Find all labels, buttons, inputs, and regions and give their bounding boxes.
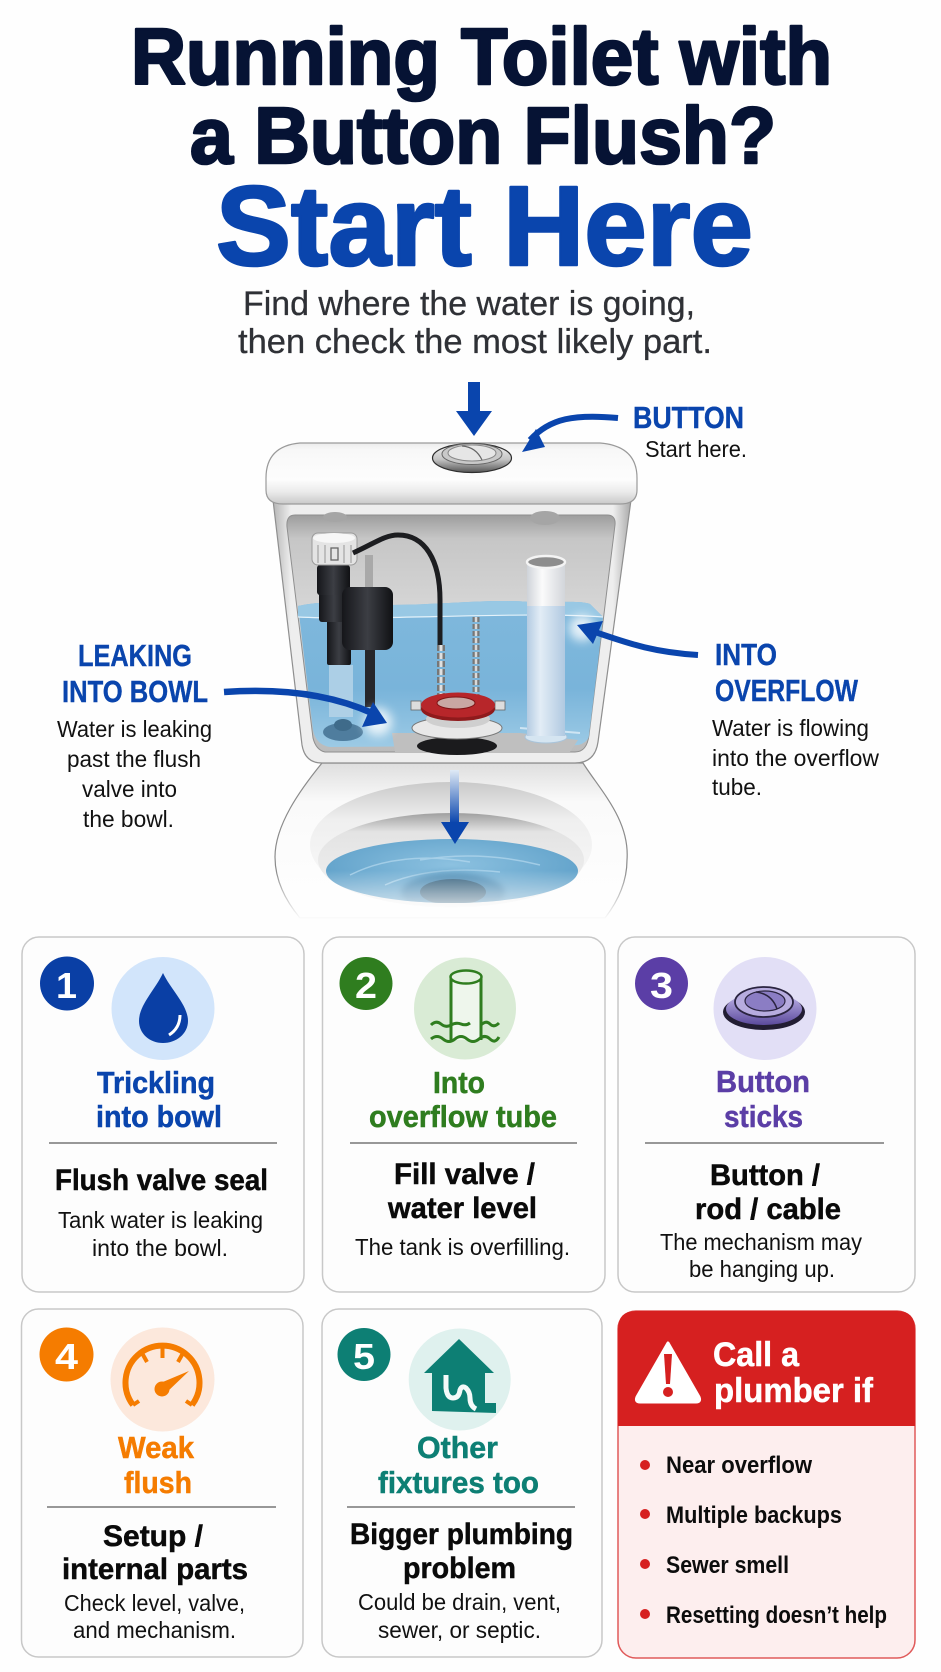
label: into overflow: Water is flowing (712, 715, 869, 741)
card 4 part (62, 1520, 248, 1586)
lid (266, 443, 637, 504)
warning list: Near overflow (666, 1452, 812, 1479)
label: button: Start here. (645, 436, 747, 462)
card 2 heading: Into (433, 1065, 485, 1100)
header text (713, 1336, 874, 1410)
badge 4: 4 (55, 1336, 78, 1377)
icon: house with pipe (409, 1328, 511, 1430)
cavity bolts (323, 511, 560, 525)
label: leaking into bowl: Water is leaking (57, 716, 212, 742)
header text: plumber if (714, 1372, 874, 1410)
card 5 heading: fixtures too (378, 1465, 539, 1500)
card 1 description: into the bowl. (92, 1235, 228, 1261)
card 5 part: Bigger plumbing (350, 1518, 573, 1551)
card 1 description (58, 1207, 263, 1261)
overflow tube (525, 556, 567, 743)
label: leaking into bowl: LEAKING (78, 638, 192, 673)
panel: card 4 weak flush (22, 1309, 303, 1657)
card 2 part (387, 1158, 537, 1225)
card 5 heading: Other (417, 1430, 498, 1465)
card 2 heading (369, 1065, 557, 1134)
card 3 part: Button / (710, 1159, 821, 1192)
card 2 description: The tank is overfilling. (355, 1234, 570, 1260)
header text: Call a (713, 1336, 800, 1374)
tank water (298, 601, 603, 752)
warning list (640, 1452, 887, 1629)
flapper chain (472, 617, 480, 697)
label: button: BUTTON (633, 400, 744, 435)
warning list: Resetting doesn’t help (666, 1602, 887, 1629)
card 4 part: Setup / (103, 1520, 204, 1553)
icon: water drop (112, 957, 214, 1060)
panel: card 2 into overflow tube (322, 937, 605, 1292)
card 5 description (358, 1589, 561, 1643)
title: Running Toilet with (131, 12, 832, 101)
toilet illustration (224, 382, 698, 918)
label: into overflow: INTO (715, 637, 777, 672)
fill valve (312, 533, 393, 741)
label: into overflow: into the overflow (712, 745, 879, 771)
warning header (618, 1311, 915, 1426)
card 5 part (350, 1518, 573, 1585)
card 4 description (64, 1590, 245, 1643)
title: a Button Flush? (190, 91, 776, 180)
badge 5: 5 (353, 1336, 375, 1377)
card 4 description: Check level, valve, (64, 1590, 245, 1616)
icon: flush button (714, 957, 816, 1060)
panel: card 5 other fixtures too (322, 1309, 602, 1657)
card 4 heading (118, 1430, 195, 1500)
label: into overflow (712, 637, 879, 800)
icon: pressure gauge (110, 1328, 214, 1432)
card 3 description: The mechanism may (660, 1229, 862, 1255)
card 3 heading: Button (716, 1064, 810, 1099)
label: leaking into bowl: the bowl. (83, 806, 174, 832)
label: leaking into bowl: valve into (82, 776, 177, 802)
arrow glows (364, 615, 595, 736)
card 1 heading (96, 1065, 222, 1134)
card 2 part: Fill valve / (394, 1158, 536, 1191)
label: leaking into bowl (57, 638, 212, 832)
card 4 heading: flush (124, 1465, 192, 1500)
card 4 description: and mechanism. (73, 1617, 236, 1643)
badge 4 (40, 1328, 94, 1382)
title (131, 12, 832, 180)
subtitle: Find where the water is going, (243, 285, 695, 323)
label: leaking into bowl: INTO BOWL (62, 674, 208, 709)
label: button (633, 400, 747, 462)
warning list: Multiple backups (666, 1502, 842, 1529)
card 2 part: water level (387, 1192, 537, 1225)
card 1 heading: into bowl (96, 1099, 222, 1134)
toilet tank body (273, 500, 631, 763)
card 1 description: Tank water is leaking (58, 1207, 263, 1233)
badge 3 (635, 957, 688, 1010)
flush button (432, 444, 512, 472)
panel: call a plumber (618, 1311, 915, 1658)
toilet bowl (275, 763, 627, 918)
arrow: down into bowl (441, 770, 469, 844)
card 3 heading (716, 1064, 810, 1134)
hose connector (437, 645, 445, 695)
heading: start here: Start Here (216, 163, 753, 289)
badge 5 (338, 1328, 390, 1381)
card 2 heading: overflow tube (369, 1099, 557, 1134)
card 5 heading (378, 1430, 539, 1500)
badge 3: 3 (650, 965, 673, 1006)
icon: warning triangle (636, 1343, 700, 1402)
icon: overflow tube (414, 958, 516, 1060)
card 3 part (695, 1159, 841, 1226)
card 4 heading: Weak (118, 1430, 195, 1465)
panel: card 3 button sticks (618, 937, 915, 1292)
badge 1: 1 (56, 965, 77, 1006)
badge 2: 2 (355, 965, 377, 1006)
flush valve (411, 692, 505, 755)
card 1 part: Flush valve seal (55, 1164, 268, 1197)
card 5 part: problem (403, 1552, 516, 1585)
card 3 description: be hanging up. (689, 1256, 835, 1282)
card 3 part: rod / cable (695, 1193, 841, 1226)
tank cavity (287, 515, 615, 752)
label: into overflow: tube. (712, 774, 762, 800)
badge 1 (40, 956, 94, 1010)
card 5 description: Could be drain, vent, (358, 1589, 561, 1615)
subtitle: then check the most likely part. (238, 323, 712, 361)
card 3 description (660, 1229, 862, 1282)
label: leaking into bowl: past the flush (67, 746, 201, 772)
badge 2 (340, 957, 392, 1010)
warning list: Sewer smell (666, 1552, 789, 1579)
subtitle (238, 285, 712, 361)
panel: card 1 trickling into bowl (22, 937, 304, 1292)
arrow: into overflow (577, 621, 698, 655)
card 5 description: sewer, or septic. (378, 1617, 541, 1643)
arrow: leaking into bowl (224, 691, 387, 727)
fill hose (353, 535, 440, 645)
card 3 heading: sticks (724, 1099, 803, 1134)
card 4 part: internal parts (62, 1553, 248, 1586)
label: into overflow: OVERFLOW (715, 673, 859, 708)
card 1 heading: Trickling (97, 1065, 215, 1100)
arrow: down to button (456, 382, 492, 436)
arrow: from button label (522, 417, 618, 452)
